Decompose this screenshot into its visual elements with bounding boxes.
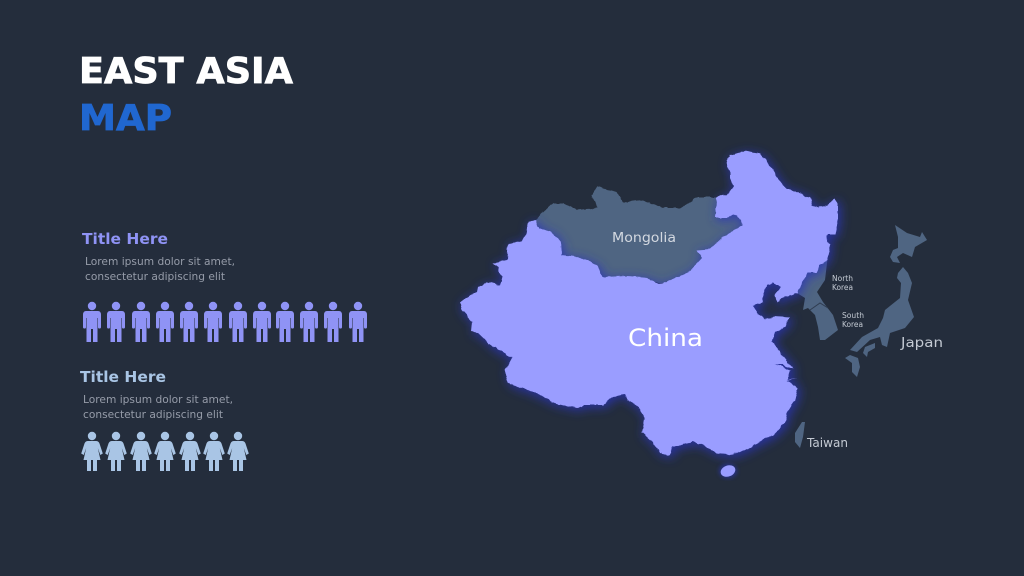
icons: row of male figures <box>83 302 367 342</box>
Korea border line <box>810 303 828 310</box>
title <box>79 51 293 139</box>
map labels: Taiwan <box>806 436 848 450</box>
Hokkaido <box>890 225 927 263</box>
text block: first description <box>85 256 235 283</box>
map labels: China <box>628 324 703 352</box>
heading: first title: Title Here <box>82 230 168 248</box>
text block: second description: Lorem ipsum dolor sit amet, <box>83 394 233 406</box>
panel: first statistic <box>82 230 367 342</box>
icons: row of female figures <box>81 432 249 471</box>
map labels: North <box>832 274 853 283</box>
map labels <box>612 231 943 450</box>
map region: Taiwan <box>795 422 805 448</box>
glow around China <box>462 153 840 457</box>
text block: second description: consectetur adipiscing elit <box>83 409 223 421</box>
map region: Korea <box>797 255 838 340</box>
heading: second title: Title Here <box>80 368 166 386</box>
panel: second statistic <box>80 368 249 471</box>
text block: first description: Lorem ipsum dolor sit amet, <box>85 256 235 268</box>
map labels: Korea <box>832 283 853 292</box>
map labels: Japan <box>900 335 943 351</box>
map labels: Korea <box>842 320 863 329</box>
title: MAP <box>79 98 172 139</box>
title: EAST ASIA <box>79 51 293 92</box>
map region: Hainan island <box>719 463 737 479</box>
text block: second description <box>83 394 233 421</box>
map: East Asia <box>460 151 943 479</box>
map labels: South <box>842 311 864 320</box>
map region: Japan <box>845 225 927 377</box>
glow around Hainan <box>719 464 737 478</box>
Kyushu <box>845 355 860 377</box>
text block: first description: consectetur adipiscing elit <box>85 271 225 283</box>
map region: China <box>460 151 838 455</box>
map region: Mongolia <box>535 187 743 285</box>
map labels: Mongolia <box>612 231 676 246</box>
Honshu <box>850 267 914 352</box>
Shikoku <box>863 343 875 357</box>
